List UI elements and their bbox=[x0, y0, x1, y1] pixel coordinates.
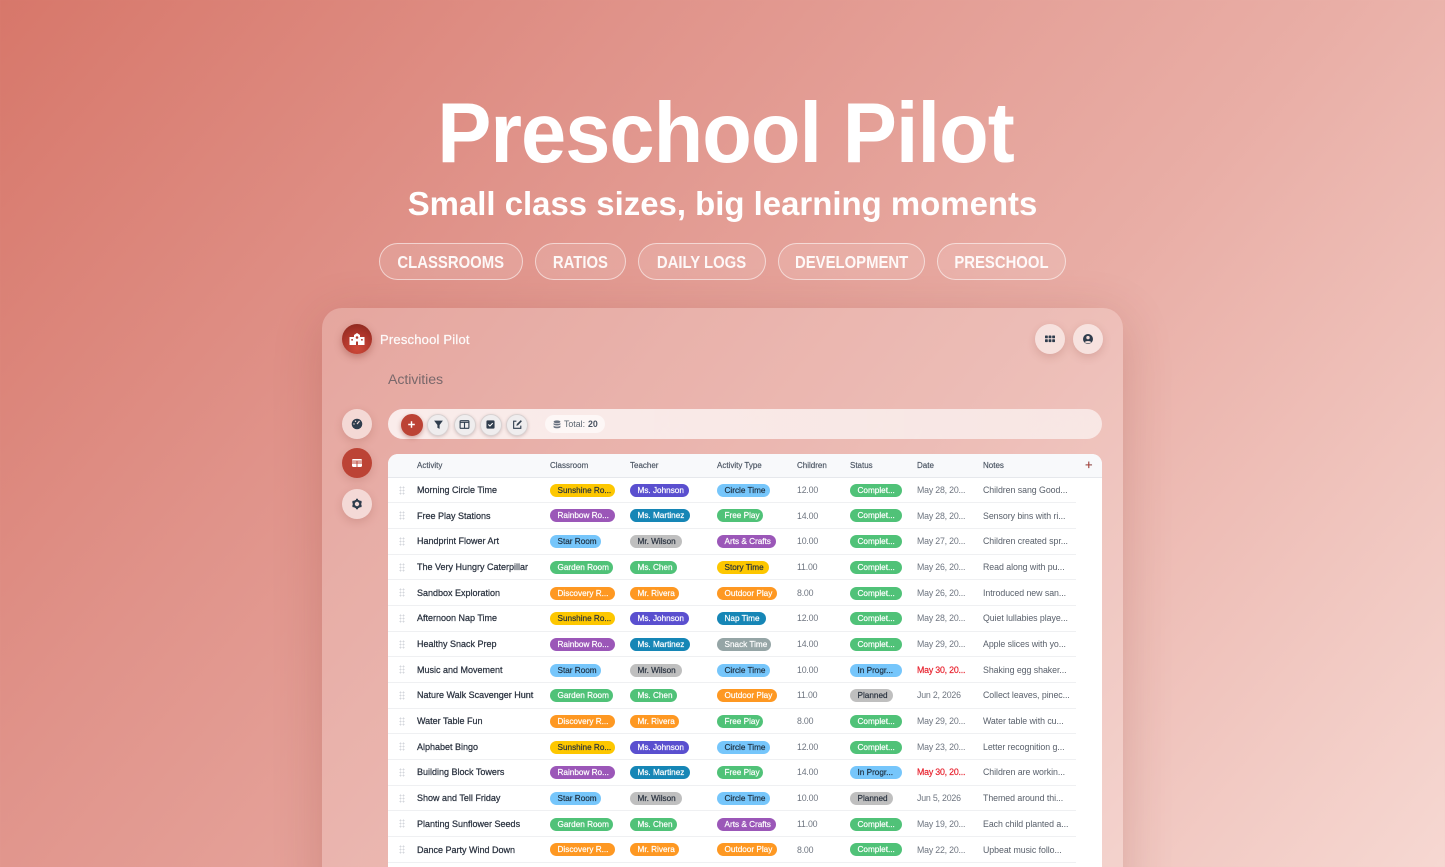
row: Afternoon Nap Time: Nap Time bbox=[724, 614, 760, 623]
row: Morning Circle Time: Circle Time bbox=[724, 486, 765, 495]
total counter: 20 bbox=[588, 419, 598, 429]
row: Alphabet Bingo: Circle Time bbox=[724, 743, 765, 752]
row: The Very Hungry Caterpillar: May 26, 20... bbox=[917, 562, 965, 572]
row: The Very Hungry Caterpillar: Complet... bbox=[858, 563, 895, 572]
row: Handprint Flower Art: Complet... bbox=[858, 537, 895, 546]
icon: apps grid button bbox=[1035, 324, 1065, 354]
tag: ratios bbox=[535, 243, 626, 280]
row: Afternoon Nap Time: Ms. Johnson bbox=[638, 614, 684, 623]
row: Music and Movement: Music and Movement bbox=[417, 665, 503, 675]
row: Sandbox Exploration: Discovery R... bbox=[558, 589, 608, 598]
row: Handprint Flower Art: May 27, 20... bbox=[917, 536, 965, 546]
row: Show and Tell Friday: Show and Tell Friday bbox=[417, 793, 500, 803]
row: Free Play Stations: 14.00 bbox=[797, 511, 818, 521]
subtitle: Small class sizes, big learning moments bbox=[408, 186, 1037, 222]
table header: Notes bbox=[983, 461, 1004, 470]
row: Sandbox Exploration bbox=[388, 580, 1076, 606]
row: Morning Circle Time: 12.00 bbox=[797, 485, 818, 495]
row: Free Play Stations: Rainbow Ro... bbox=[558, 511, 609, 520]
row: Alphabet Bingo: Sunshine Ro... bbox=[558, 743, 611, 752]
row: Water Table Fun: Mr. Rivera bbox=[638, 717, 675, 726]
row: Nature Walk Scavenger Hunt bbox=[388, 683, 1076, 709]
row: Planting Sunflower Seeds: May 19, 20... bbox=[917, 819, 965, 829]
row: Water Table Fun: Water Table Fun bbox=[417, 716, 483, 726]
table header: Date bbox=[917, 461, 934, 470]
title: Preschool Pilot bbox=[437, 86, 1014, 180]
row: Afternoon Nap Time: May 28, 20... bbox=[917, 613, 965, 623]
row: Planting Sunflower Seeds: Complet... bbox=[858, 820, 895, 829]
row: Handprint Flower Art: Children created spr... bbox=[983, 536, 1068, 546]
row: Dance Party Wind Down: Dance Party Wind Down bbox=[417, 845, 515, 855]
logo icon bbox=[342, 324, 372, 354]
row: Building Block Towers: Ms. Martinez bbox=[638, 768, 684, 777]
row: Show and Tell Friday: Planned bbox=[858, 794, 888, 803]
nav: settings button bbox=[342, 489, 372, 519]
tag: daily logs bbox=[638, 243, 766, 280]
row: Building Block Towers: Free Play bbox=[724, 768, 760, 777]
row: Music and Movement bbox=[388, 657, 1076, 683]
row: Handprint Flower Art: Arts & Crafts bbox=[724, 537, 771, 546]
row: Nature Walk Scavenger Hunt: 11.00 bbox=[797, 690, 817, 700]
row: Show and Tell Friday: Themed around thi... bbox=[983, 793, 1063, 803]
row: The Very Hungry Caterpillar: Read along with pu... bbox=[983, 562, 1065, 572]
row: Sandbox Exploration: Sandbox Exploration bbox=[417, 588, 500, 598]
row: Handprint Flower Art bbox=[388, 529, 1076, 555]
page heading: Activities bbox=[388, 372, 443, 388]
row: Healthy Snack Prep: 14.00 bbox=[797, 639, 818, 649]
table header: Status bbox=[850, 461, 873, 470]
row: Planting Sunflower Seeds: Each child planted a... bbox=[983, 819, 1068, 829]
row: Water Table Fun: Discovery R... bbox=[558, 717, 608, 726]
row: Show and Tell Friday: 10.00 bbox=[797, 793, 818, 803]
row: Show and Tell Friday bbox=[388, 786, 1076, 811]
row: Handprint Flower Art: 10.00 bbox=[797, 536, 818, 546]
tag: classrooms bbox=[379, 243, 523, 280]
row: Planting Sunflower Seeds: Garden Room bbox=[558, 820, 609, 829]
row: Healthy Snack Prep: Snack Time bbox=[724, 640, 767, 649]
row: Healthy Snack Prep: Rainbow Ro... bbox=[558, 640, 609, 649]
row: Sandbox Exploration: Complet... bbox=[858, 589, 895, 598]
row: Music and Movement: May 30, 20... bbox=[917, 665, 965, 675]
row: Healthy Snack Prep: Ms. Martinez bbox=[638, 640, 684, 649]
row: Water Table Fun: Free Play bbox=[724, 717, 760, 726]
row: Healthy Snack Prep: Healthy Snack Prep bbox=[417, 639, 497, 649]
row: Alphabet Bingo: May 23, 20... bbox=[917, 742, 965, 752]
tag: development bbox=[778, 243, 925, 280]
row: Dance Party Wind Down: Upbeat music follo... bbox=[983, 845, 1062, 855]
row: Healthy Snack Prep: Complet... bbox=[858, 640, 895, 649]
row: Nature Walk Scavenger Hunt: Nature Walk Scavenger Hunt bbox=[417, 690, 533, 700]
data table bbox=[388, 454, 1102, 867]
row: Building Block Towers: Building Block Towers bbox=[417, 767, 504, 777]
row: Water Table Fun: 8.00 bbox=[797, 716, 813, 726]
row: Handprint Flower Art: Star Room bbox=[558, 537, 597, 546]
row: Music and Movement: 10.00 bbox=[797, 665, 818, 675]
row: Morning Circle Time bbox=[388, 478, 1076, 503]
row: Healthy Snack Prep: Apple slices with yo... bbox=[983, 639, 1066, 649]
table header: Activity Type bbox=[717, 461, 762, 470]
row: Show and Tell Friday: Circle Time bbox=[724, 794, 765, 803]
row: The Very Hungry Caterpillar: 11.00 bbox=[797, 562, 817, 572]
row: Sandbox Exploration: Outdoor Play bbox=[724, 589, 772, 598]
row: The Very Hungry Caterpillar: Garden Room bbox=[558, 563, 609, 572]
row: Planting Sunflower Seeds: Planting Sunflower Seeds bbox=[417, 819, 520, 829]
row: Afternoon Nap Time: Afternoon Nap Time bbox=[417, 613, 497, 623]
row: Sandbox Exploration: Mr. Rivera bbox=[638, 589, 675, 598]
row: Music and Movement: In Progr... bbox=[858, 666, 893, 675]
row: Morning Circle Time: Ms. Johnson bbox=[638, 486, 684, 495]
row: Free Play Stations: May 28, 20... bbox=[917, 511, 965, 521]
row: Healthy Snack Prep bbox=[388, 632, 1076, 657]
row: Building Block Towers: In Progr... bbox=[858, 768, 893, 777]
row: Afternoon Nap Time: Complet... bbox=[858, 614, 895, 623]
row: Dance Party Wind Down: Complet... bbox=[858, 845, 895, 854]
row: Show and Tell Friday: Mr. Wilson bbox=[638, 794, 676, 803]
row: Dance Party Wind Down bbox=[388, 837, 1076, 863]
button: add bbox=[400, 414, 422, 436]
row: Healthy Snack Prep: May 29, 20... bbox=[917, 639, 965, 649]
tag: ratios: RATIOS bbox=[553, 252, 608, 272]
row: Building Block Towers: 14.00 bbox=[797, 767, 818, 777]
row: Morning Circle Time: Complet... bbox=[858, 486, 895, 495]
row: Nature Walk Scavenger Hunt: Planned bbox=[858, 691, 888, 700]
row: Building Block Towers: May 30, 20... bbox=[917, 767, 965, 777]
row: Show and Tell Friday: Jun 5, 2026 bbox=[917, 793, 961, 803]
row: Morning Circle Time: Morning Circle Time bbox=[417, 485, 497, 495]
row: Dance Party Wind Down: Discovery R... bbox=[558, 845, 608, 854]
row: The Very Hungry Caterpillar bbox=[388, 555, 1076, 580]
table header: + bbox=[1085, 457, 1093, 472]
row: The Very Hungry Caterpillar: The Very Hungry Caterpillar bbox=[417, 562, 528, 572]
tag: daily logs: DAILY LOGS bbox=[657, 252, 747, 272]
row: Nature Walk Scavenger Hunt: Jun 2, 2026 bbox=[917, 690, 961, 700]
row: Dance Party Wind Down: 8.00 bbox=[797, 845, 813, 855]
row: Water Table Fun bbox=[388, 709, 1076, 734]
row: Free Play Stations bbox=[388, 503, 1076, 529]
row: Music and Movement: Star Room bbox=[558, 666, 597, 675]
row: The Very Hungry Caterpillar: Story Time bbox=[724, 563, 764, 572]
row: Free Play Stations: Free Play bbox=[724, 511, 760, 520]
tag: development: DEVELOPMENT bbox=[795, 252, 908, 272]
row: Planting Sunflower Seeds bbox=[388, 811, 1076, 837]
row: Sandbox Exploration: May 26, 20... bbox=[917, 588, 965, 598]
tag: classrooms: CLASSROOMS bbox=[398, 252, 504, 272]
row: Water Table Fun: Water table with cu... bbox=[983, 716, 1064, 726]
row: Afternoon Nap Time: 12.00 bbox=[797, 613, 818, 623]
total counter bbox=[545, 415, 605, 433]
row: Nature Walk Scavenger Hunt: Garden Room bbox=[558, 691, 609, 700]
row: Show and Tell Friday: Star Room bbox=[558, 794, 597, 803]
table header bbox=[388, 454, 1102, 478]
row: Music and Movement: Circle Time bbox=[724, 666, 765, 675]
row: Planting Sunflower Seeds: Ms. Chen bbox=[638, 820, 673, 829]
nav: table button active bbox=[342, 448, 372, 478]
table header: Teacher bbox=[630, 461, 658, 470]
row: Handprint Flower Art: Mr. Wilson bbox=[638, 537, 676, 546]
row: Water Table Fun: Complet... bbox=[858, 717, 895, 726]
nav: dashboard button bbox=[342, 409, 372, 439]
row: Morning Circle Time: Sunshine Ro... bbox=[558, 486, 611, 495]
row: Afternoon Nap Time: Sunshine Ro... bbox=[558, 614, 611, 623]
button: edit bbox=[506, 414, 528, 436]
row: Building Block Towers: Rainbow Ro... bbox=[558, 768, 609, 777]
row: Handprint Flower Art: Handprint Flower Art bbox=[417, 536, 499, 546]
row: Alphabet Bingo bbox=[388, 734, 1076, 760]
row: Free Play Stations: Ms. Martinez bbox=[638, 511, 684, 520]
button: columns bbox=[454, 414, 476, 436]
row: Free Play Stations: Sensory bins with ri... bbox=[983, 511, 1065, 521]
row: Nature Walk Scavenger Hunt: Outdoor Play bbox=[724, 691, 772, 700]
row: Building Block Towers bbox=[388, 760, 1076, 786]
row: Planting Sunflower Seeds: Arts & Crafts bbox=[724, 820, 771, 829]
table header: Children bbox=[797, 461, 827, 470]
row: The Very Hungry Caterpillar: Ms. Chen bbox=[638, 563, 673, 572]
table header: Classroom bbox=[550, 461, 588, 470]
tag pills bbox=[379, 243, 1066, 280]
row: Sandbox Exploration: 8.00 bbox=[797, 588, 813, 598]
row: Music and Movement: Shaking egg shaker... bbox=[983, 665, 1067, 675]
row: Nature Walk Scavenger Hunt: Ms. Chen bbox=[638, 691, 673, 700]
row: Alphabet Bingo: Ms. Johnson bbox=[638, 743, 684, 752]
table header: Activity bbox=[417, 461, 442, 470]
panel: app window bbox=[322, 308, 1123, 867]
total counter: Total: bbox=[564, 419, 585, 429]
tag: preschool: PRESCHOOL bbox=[954, 252, 1049, 272]
row: Alphabet Bingo: Letter recognition g... bbox=[983, 742, 1064, 752]
tag: preschool bbox=[937, 243, 1066, 280]
toolbar bbox=[388, 409, 1102, 439]
row: Water Table Fun: May 29, 20... bbox=[917, 716, 965, 726]
row: Building Block Towers: Children are workin... bbox=[983, 767, 1065, 777]
row: Nature Walk Scavenger Hunt: Collect leaves, pinec... bbox=[983, 690, 1070, 700]
row: Afternoon Nap Time: Quiet lullabies playe... bbox=[983, 613, 1068, 623]
row: Sandbox Exploration: Introduced new san... bbox=[983, 588, 1066, 598]
row: Morning Circle Time: Children sang Good... bbox=[983, 485, 1068, 495]
row: Music and Movement: Mr. Wilson bbox=[638, 666, 676, 675]
button: select bbox=[480, 414, 502, 436]
row: Free Play Stations: Free Play Stations bbox=[417, 511, 491, 521]
app name: Preschool Pilot bbox=[380, 332, 470, 347]
row: Alphabet Bingo: Alphabet Bingo bbox=[417, 742, 478, 752]
row: Free Play Stations: Complet... bbox=[858, 511, 895, 520]
button: filter bbox=[427, 414, 449, 436]
row: Dance Party Wind Down: Outdoor Play bbox=[724, 845, 772, 854]
row: Alphabet Bingo: 12.00 bbox=[797, 742, 818, 752]
row: Afternoon Nap Time bbox=[388, 606, 1076, 632]
row: Planting Sunflower Seeds: 11.00 bbox=[797, 819, 817, 829]
icon: user button bbox=[1072, 324, 1102, 354]
row: Dance Party Wind Down: Mr. Rivera bbox=[638, 845, 675, 854]
row: Alphabet Bingo: Complet... bbox=[858, 743, 895, 752]
row: Morning Circle Time: May 28, 20... bbox=[917, 485, 965, 495]
row: Dance Party Wind Down: May 22, 20... bbox=[917, 845, 965, 855]
